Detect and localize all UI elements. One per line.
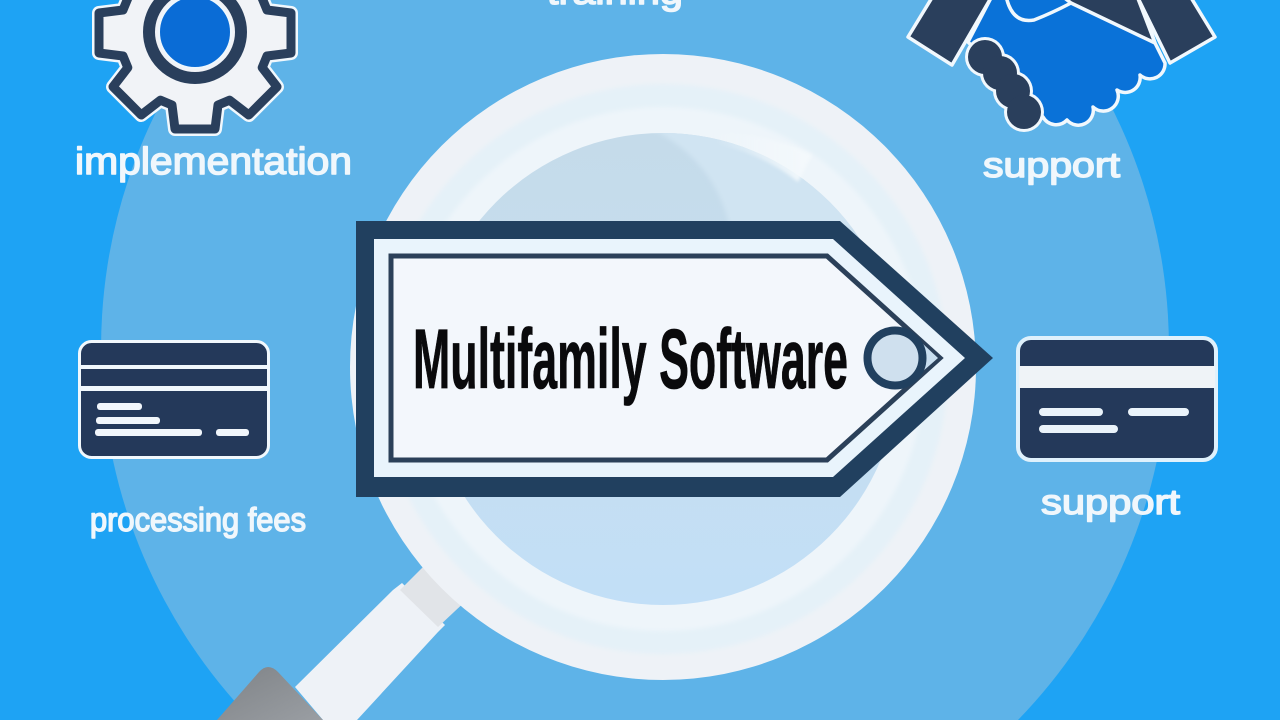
icon: handshake xyxy=(908,0,1215,132)
dark hand top xyxy=(1062,0,1155,43)
left cuff xyxy=(908,0,992,65)
tag inner panel xyxy=(374,239,965,477)
icon: credit card left xyxy=(80,342,268,458)
dark fingers xyxy=(965,37,1044,132)
label: support right: support xyxy=(1041,483,1180,522)
price tag xyxy=(356,221,993,497)
magnifier handle xyxy=(217,560,470,720)
icon: gear xyxy=(99,0,291,129)
tag outer border xyxy=(356,221,993,497)
tag inner outline xyxy=(391,256,940,460)
right cuff xyxy=(1137,0,1215,63)
icon: credit card right xyxy=(1018,338,1216,460)
magnifier rim xyxy=(350,54,976,680)
magnifier lens xyxy=(465,133,881,605)
label: support top right: support xyxy=(983,146,1120,185)
magnifying glass xyxy=(217,54,976,720)
hand thumb outline xyxy=(1006,0,1071,20)
tag tip accent xyxy=(922,343,938,372)
label: implementation: implementation xyxy=(75,141,352,183)
tag eyelet xyxy=(868,330,922,386)
blue hand xyxy=(968,0,1165,125)
label: processing fees: processing fees xyxy=(90,501,306,538)
tag title: Multifamily Software xyxy=(413,312,848,406)
